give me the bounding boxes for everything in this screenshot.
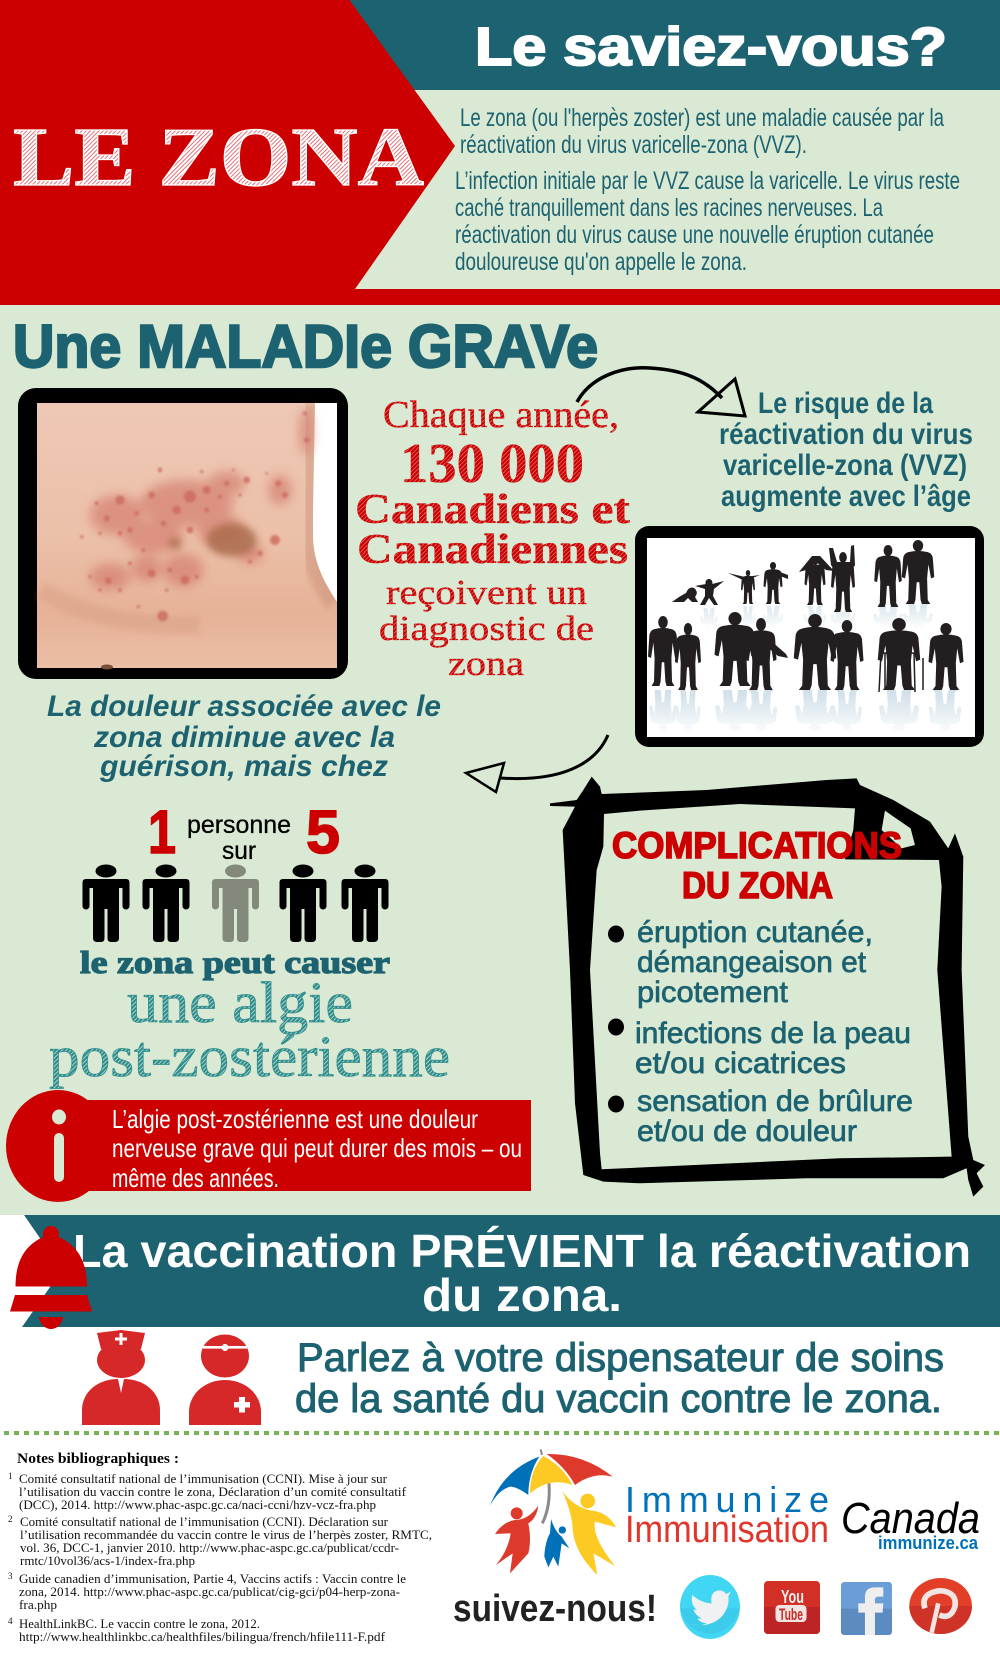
logo text: Canada immunize.ca: immunize.ca [878, 1533, 979, 1553]
text: une algie post-zostérienne: post-zostérienne [49, 1024, 450, 1089]
heading: complications du zona: COMPLICATIONS [612, 825, 902, 866]
text block: pain diminishes [47, 690, 441, 783]
text block: references: 1 [8, 1471, 12, 1481]
stat: 1 person in 5 [148, 798, 340, 866]
green background [0, 0, 1000, 1215]
icon: youtube: Tube [779, 1605, 803, 1624]
list: complications: et/ou cicatrices [635, 1047, 846, 1080]
text block: risk increases with age: varicelle-zona (VVZ) [723, 449, 967, 482]
teal header band [340, 0, 1000, 90]
list: complications: éruption cutanée, [637, 916, 873, 949]
text block: references: Comité consultatif national de l’immunisation (CCNI). Mise à jour sur [19, 1472, 388, 1486]
text block: risk increases with age [719, 387, 973, 513]
text block: references: fra.php [19, 1598, 57, 1612]
text block: intro: douloureuse qu'on appelle le zona. [455, 248, 747, 276]
banner: vaccination [22, 1215, 1000, 1327]
icon: facebook [841, 1582, 892, 1635]
text block: references: (DCC), 2014. http://www.phac-aspc.gc.ca/naci-ccni/hzv-vcz-fra.php [19, 1498, 376, 1512]
red arrow panel [0, 0, 1000, 305]
heading: Le saviez-vous?: Le saviez-vous? [475, 17, 947, 77]
list: complications: picotement [637, 976, 789, 1009]
text block: pain diminishes: La douleur associée avec le [47, 690, 441, 723]
list: complications [608, 916, 913, 1148]
stat: 130 000 Canadiens diagnosed [355, 394, 630, 683]
logo text: Immunize Immunisation [625, 1479, 829, 1551]
text block: references: 4 [8, 1616, 13, 1626]
stat: 1 person in 5: sur [222, 837, 256, 865]
text block: intro: réactivation du virus varicelle-zona (VVZ). [460, 131, 807, 159]
stat: 130 000 Canadiens diagnosed: 130 000 [400, 433, 584, 495]
callout: info about post-herpetic neuralgia: même des années. [112, 1163, 279, 1193]
text: une algie post-zostérienne [49, 970, 450, 1089]
icon: youtube [764, 1581, 820, 1634]
text block: references: Comité consultatif national de l’immunisation (CCNI). Déclaration sur [20, 1515, 389, 1529]
text block: pain diminishes: guérison, mais chez [99, 750, 388, 783]
stat: 130 000 Canadiens diagnosed: diagnostic de [379, 609, 594, 648]
text block: references: http://www.healthlinkbc.ca/healthfiles/bilingua/french/hfile111-F.pdf [19, 1630, 386, 1644]
banner: vaccination: du zona. [422, 1269, 622, 1321]
text block: references: Notes bibliographiques : [17, 1451, 179, 1467]
text block: references: Guide canadien d’immunisation, Partie 4, Vaccins actifs : Vaccin contre le [19, 1572, 406, 1586]
logo: umbrella and figures [490, 1449, 616, 1575]
photo: shingles rash on torso [18, 388, 348, 679]
text block: intro [455, 104, 960, 276]
text block: references: HealthLinkBC. Le vaccin contre le zona, 2012. [19, 1617, 260, 1631]
icon: twitter [680, 1575, 740, 1639]
stat: 130 000 Canadiens diagnosed: Canadiennes [357, 527, 628, 573]
image: silhouettes of people by age [635, 526, 984, 747]
title: LE ZONA: LE ZONA [13, 111, 424, 204]
stat: 1 person in 5: 1 [148, 798, 176, 866]
stat: 1 person in 5: personne [187, 811, 291, 839]
text block: references: 2 [8, 1514, 12, 1524]
text block: references: rmtc/10vol36/acs-1/index-fra.php [20, 1554, 195, 1568]
text block: references: 3 [8, 1571, 13, 1581]
icon: bell [10, 1226, 92, 1329]
icon: info letter i [52, 1110, 66, 1182]
arrow: to risk text [577, 368, 745, 416]
stat: 130 000 Canadiens diagnosed: reçoivent un [386, 573, 587, 612]
logo text: Canada immunize.ca: Canada [841, 1494, 980, 1543]
panel: complications brush frame [550, 777, 985, 1197]
icon: nurse [82, 1330, 160, 1425]
banner: vaccination: La vaccination PRÉVIENT la réactivation [73, 1225, 971, 1277]
logo text: Immunize Immunisation: Immunize [625, 1479, 829, 1520]
list: complications: sensation de brûlure [637, 1085, 913, 1118]
stat: 130 000 Canadiens diagnosed: Chaque année, [383, 394, 619, 436]
list: complications: infections de la peau [635, 1017, 911, 1050]
text: talk to your provider: Parlez à votre dispensateur de soins [297, 1336, 944, 1380]
text: talk to your provider: de la santé du vaccin contre le zona. [295, 1377, 942, 1421]
text block: references: vol. 36, DCC-1, janvier 2010. http://www.phac-aspc.gc.ca/publicat/ccdr- [20, 1541, 399, 1555]
callout: info about post-herpetic neuralgia: L’algie post-zostérienne est une douleur [112, 1104, 478, 1134]
stat: 1 person in 5: 5 [306, 798, 340, 866]
logo text: Immunize Immunisation: Immunisation [625, 1509, 829, 1551]
icons: five people, one highlighted [82, 864, 388, 942]
text block: references [8, 1451, 432, 1644]
icon: doctor [189, 1334, 261, 1425]
stat: 130 000 Canadiens diagnosed: Canadiens et [355, 487, 630, 533]
text block: references: zona, 2014. http://www.phac-aspc.gc.ca/publicat/cig-gci/p04-herp-zona- [19, 1585, 400, 1599]
arrow: to pain text [466, 735, 608, 792]
icon: youtube: You [781, 1587, 804, 1607]
icon: pinterest [909, 1578, 972, 1634]
text: le zona peut causer: le zona peut causer [80, 944, 390, 980]
callout: info about post-herpetic neuralgia: nerveuse grave qui peut durer des mois – ou [112, 1133, 522, 1163]
heading: complications du zona: DU ZONA [682, 865, 833, 906]
callout: info about post-herpetic neuralgia [6, 1090, 531, 1202]
text: suivez-nous: suivez-nous! [453, 1588, 657, 1630]
stat: 130 000 Canadiens diagnosed: zona [448, 644, 525, 683]
text: une algie post-zostérienne: une algie [127, 970, 353, 1035]
text block: risk increases with age: Le risque de la [758, 387, 933, 420]
heading: complications du zona [612, 825, 902, 906]
text block: pain diminishes: zona diminue avec la [93, 721, 395, 754]
list: complications: et/ou de douleur [637, 1115, 857, 1148]
text block: references: l’utilisation du vaccin contre le zona, Déclaration d’un comité consultatif [19, 1485, 407, 1499]
heading: une maladie grave: Une MALADIe GRAVe [13, 313, 598, 380]
text: talk to your provider [295, 1336, 944, 1421]
list: complications: démangeaison et [637, 946, 867, 979]
text block: references: l’utilisation recommandée du vaccin contre le virus de l’herpès zoster, RMTC, [20, 1528, 432, 1542]
